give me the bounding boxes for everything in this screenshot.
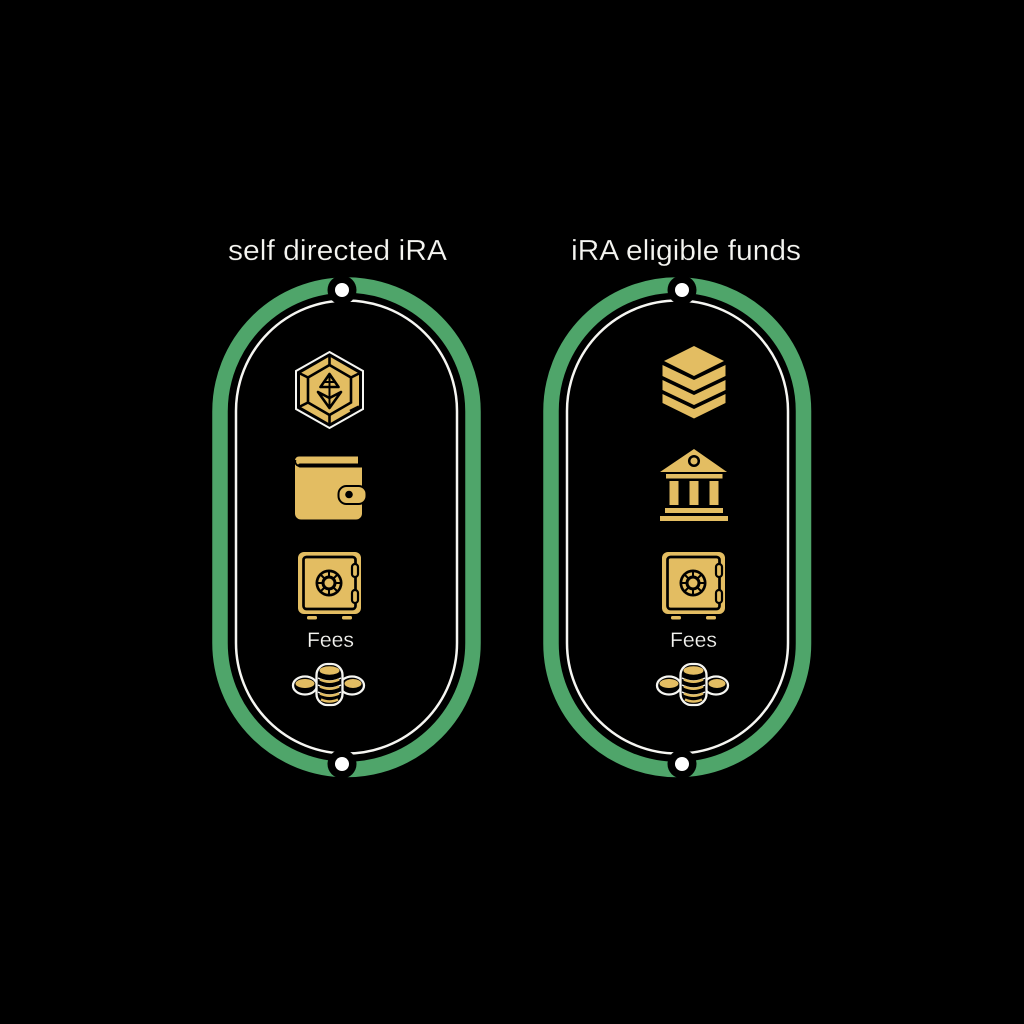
- label: Fees: Fees: [670, 629, 717, 652]
- icon: bank building: [660, 449, 728, 521]
- inner white capsule: [567, 300, 788, 754]
- icon: safe: [298, 552, 361, 620]
- icon: coins: [657, 664, 728, 705]
- top node: [668, 276, 696, 304]
- heading: iRA eligible funds: iRA eligible funds: [571, 235, 801, 267]
- icon: layered stack: [662, 346, 726, 418]
- bottom node: [668, 750, 696, 778]
- icon: coins: [293, 664, 364, 705]
- outer green capsule: [551, 285, 804, 770]
- heading: self directed iRA: self directed iRA: [228, 235, 448, 267]
- bottom node: [328, 750, 356, 778]
- label: Fees: Fees: [307, 629, 354, 652]
- panel: iRA eligible funds: [551, 276, 804, 778]
- outer green capsule: [220, 285, 473, 770]
- icon: hexagonal gem: [296, 352, 363, 428]
- icon: wallet: [295, 456, 366, 520]
- panel: self directed iRA: [220, 276, 473, 778]
- inner white capsule: [236, 300, 457, 754]
- top node: [328, 276, 356, 304]
- icon: safe: [662, 552, 725, 620]
